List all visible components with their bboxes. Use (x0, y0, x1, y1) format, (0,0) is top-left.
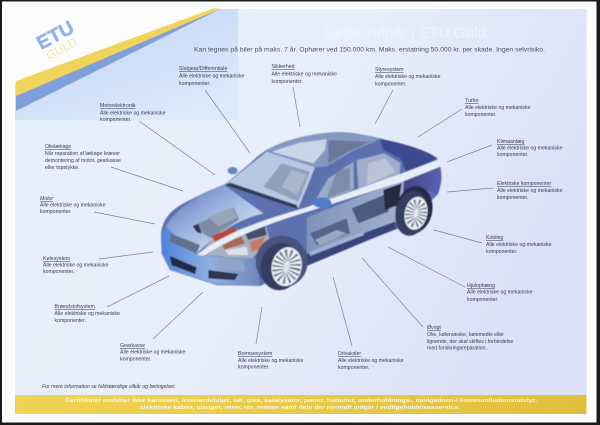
callout: Drivaksler: komponenter. (338, 365, 369, 371)
callout: Kobling: komponenter. (486, 249, 517, 255)
callout: Kobling: Alle elektriske og mekaniske (486, 242, 552, 248)
callout: Klimaanlæg (447, 139, 563, 162)
callout: Bremsesystem: komponenter. (238, 364, 269, 370)
callout: Elektriske komponenter (447, 181, 563, 201)
callout: Olielækage: demontering af motor, gearkasse (45, 158, 121, 164)
callout: Styresystem: Alle elektriske og mekaniske (375, 74, 441, 80)
footnote: For mere information se fuldstændige vilkår og betingelser. (42, 383, 176, 390)
windshield (225, 152, 315, 208)
callout: Motorelektronik (100, 103, 215, 175)
rear wheel (391, 188, 432, 239)
panel: top-left tint (15, 9, 238, 120)
door panels (307, 179, 405, 263)
callout: Olielækage (45, 144, 183, 191)
callout: Styresystem: komponenter. (375, 82, 406, 88)
pillars (307, 151, 405, 207)
callout: Turbo (418, 98, 531, 137)
front wheel (256, 239, 305, 294)
logo: ETU Guld: GULD (44, 35, 80, 63)
rear quarter (402, 166, 441, 206)
callout: Brændstofsystem: komponenter. (54, 318, 86, 324)
callout: Drivaksler: Alle elektriske og mekaniske (338, 358, 404, 364)
rear deck (380, 139, 437, 173)
callout: Motor: Alle elektriske og mekaniske (40, 202, 106, 208)
callout: Klimaanlæg: Alle elektriske og mekaniske (497, 146, 563, 152)
bottom band text (65, 398, 537, 411)
callout: Øvrigt: Øvrigt (427, 325, 441, 331)
rear wheel arch (391, 183, 437, 237)
callout: Øvrigt (362, 258, 513, 352)
callout: Olielækage: Olielækage (45, 144, 71, 150)
callout: Hjulophæng: Alle elektriske og mekaniske (467, 290, 533, 296)
bottom band text: Certifikatet omfatter ikke karosseri, interiørdetaljer, lak, glas, katalysator, pærer, batterier, underholdnings-, navigations-/ kommunikationsudstyr, (65, 398, 537, 404)
callout: Turbo: Alle elektriske og mekaniske (465, 105, 531, 111)
callout: Motorelektronik: komponenter. (100, 117, 131, 123)
callout: Kølesystem (43, 252, 153, 275)
callout: Slutgear/Differentiale: komponenter. (179, 81, 210, 87)
callout: Styresystem (375, 67, 441, 124)
car silhouette (161, 133, 441, 286)
callout: Elektriske komponenter: Elektriske komponenter (497, 181, 551, 187)
callout: Motor (40, 196, 155, 224)
callout: Klimaanlæg: Klimaanlæg (497, 139, 525, 145)
callout: Turbo: Turbo (465, 98, 478, 104)
callout: Motor: komponenter. (40, 209, 71, 215)
callout: Slutgear/Differentiale: Slutgear/Differentiale (179, 66, 227, 72)
callout: Gearkasse: Gearkasse (120, 343, 145, 349)
callout: Elektriske komponenter: Alle elektriske og mekaniske (497, 188, 563, 194)
front fascia (161, 227, 260, 286)
callout: Kobling: Kobling (486, 235, 503, 241)
callout: Gearkasse: Alle elektriske og mekaniske (120, 350, 186, 356)
beltline highlight (197, 159, 440, 256)
lower intake (170, 256, 197, 274)
title: Dette indgår i ETU Guld (324, 26, 486, 42)
callout: Øvrigt: Olie, kølervæske, kølemedie eller (427, 332, 504, 338)
hood (166, 185, 263, 254)
callout: Øvrigt: lignende, der skal skiftes i forbindelse (427, 339, 513, 345)
callout: Hjulophæng: Hjulophæng (467, 283, 495, 289)
callout: Gearkasse: komponenter. (120, 356, 151, 362)
callout: Kølesystem: Kølesystem (43, 256, 70, 262)
logo: ETU Guld: ETU (33, 18, 78, 54)
car illustration (161, 132, 441, 294)
callout: Brændstofsystem (54, 276, 169, 324)
callout: Kølesystem: Alle elektriske og mekaniske (43, 262, 109, 268)
callout: Sikkerhed (272, 64, 337, 127)
callout: Kølesystem: komponenter. (43, 269, 74, 275)
callout: Drivaksler (333, 277, 404, 371)
callout: Styresystem: Styresystem (375, 67, 404, 73)
front wheel arch (251, 231, 313, 293)
white corner behind logo (15, 9, 216, 84)
callout: Drivaksler: Drivaksler (338, 351, 361, 357)
callout: Motorelektronik: Alle elektriske og mekaniske (100, 110, 166, 116)
callout: Bremsesystem (238, 307, 304, 370)
callout: Brændstofsystem: Alle elektriske og mekaniske (54, 311, 120, 317)
callout: Motorelektronik: Motorelektronik (100, 103, 136, 109)
callout: Gearkasse (120, 292, 203, 362)
mirrors (228, 167, 331, 208)
bottom band text: elektriske kabler, slanger, wirer, rør, remme samt dele der normalt indgår i vedligeholdelsesservice. (140, 404, 460, 411)
rocker (307, 222, 396, 266)
callout: Slutgear/Differentiale: Alle elektriske og mekaniske (179, 74, 245, 80)
callout: Klimaanlæg: komponenter. (497, 152, 528, 158)
subtitle: Kan tegnes på biler på maks. 7 år. Ophører ved 150.000 km. Maks. erstatning 50.000 kr. per skade. Ingen selvrisiko. (194, 46, 545, 54)
callout: Brændstofsystem: Brændstofsystem (54, 304, 95, 310)
bottom band (15, 395, 586, 414)
side glass (309, 159, 354, 207)
callout: Elektriske komponenter: komponenter. (497, 195, 528, 201)
callout: Olielækage: Når reparation af lækage kræver (45, 150, 120, 157)
roof (265, 132, 380, 167)
engine bay (200, 223, 270, 261)
callout: Sikkerhed: komponenter. (272, 79, 303, 85)
callout: Kobling (434, 230, 552, 255)
callout: Bremsesystem: Bremsesystem (238, 351, 272, 357)
callout: Turbo: komponenter. (465, 112, 496, 118)
callout: Slutgear/Differentiale (179, 66, 250, 153)
engine cover (193, 207, 239, 238)
diagonal stripes (16, 8, 221, 111)
callout: Sikkerhed: Sikkerhed (272, 64, 295, 70)
callout: Motor: Motor (40, 196, 54, 202)
callout: Hjulophæng: komponenter. (467, 297, 498, 303)
callout: Øvrigt: med forsikringsreparation. (427, 346, 487, 352)
callout: Bremsesystem: Alle elektriske og mekaniske (238, 358, 304, 364)
upper grille (170, 233, 200, 253)
callout: Sikkerhed: Alle elektriske og mekaniske (272, 72, 337, 78)
callout: Olielækage: eller topstykke. (45, 165, 80, 171)
callout: Hjulophæng (388, 247, 533, 303)
